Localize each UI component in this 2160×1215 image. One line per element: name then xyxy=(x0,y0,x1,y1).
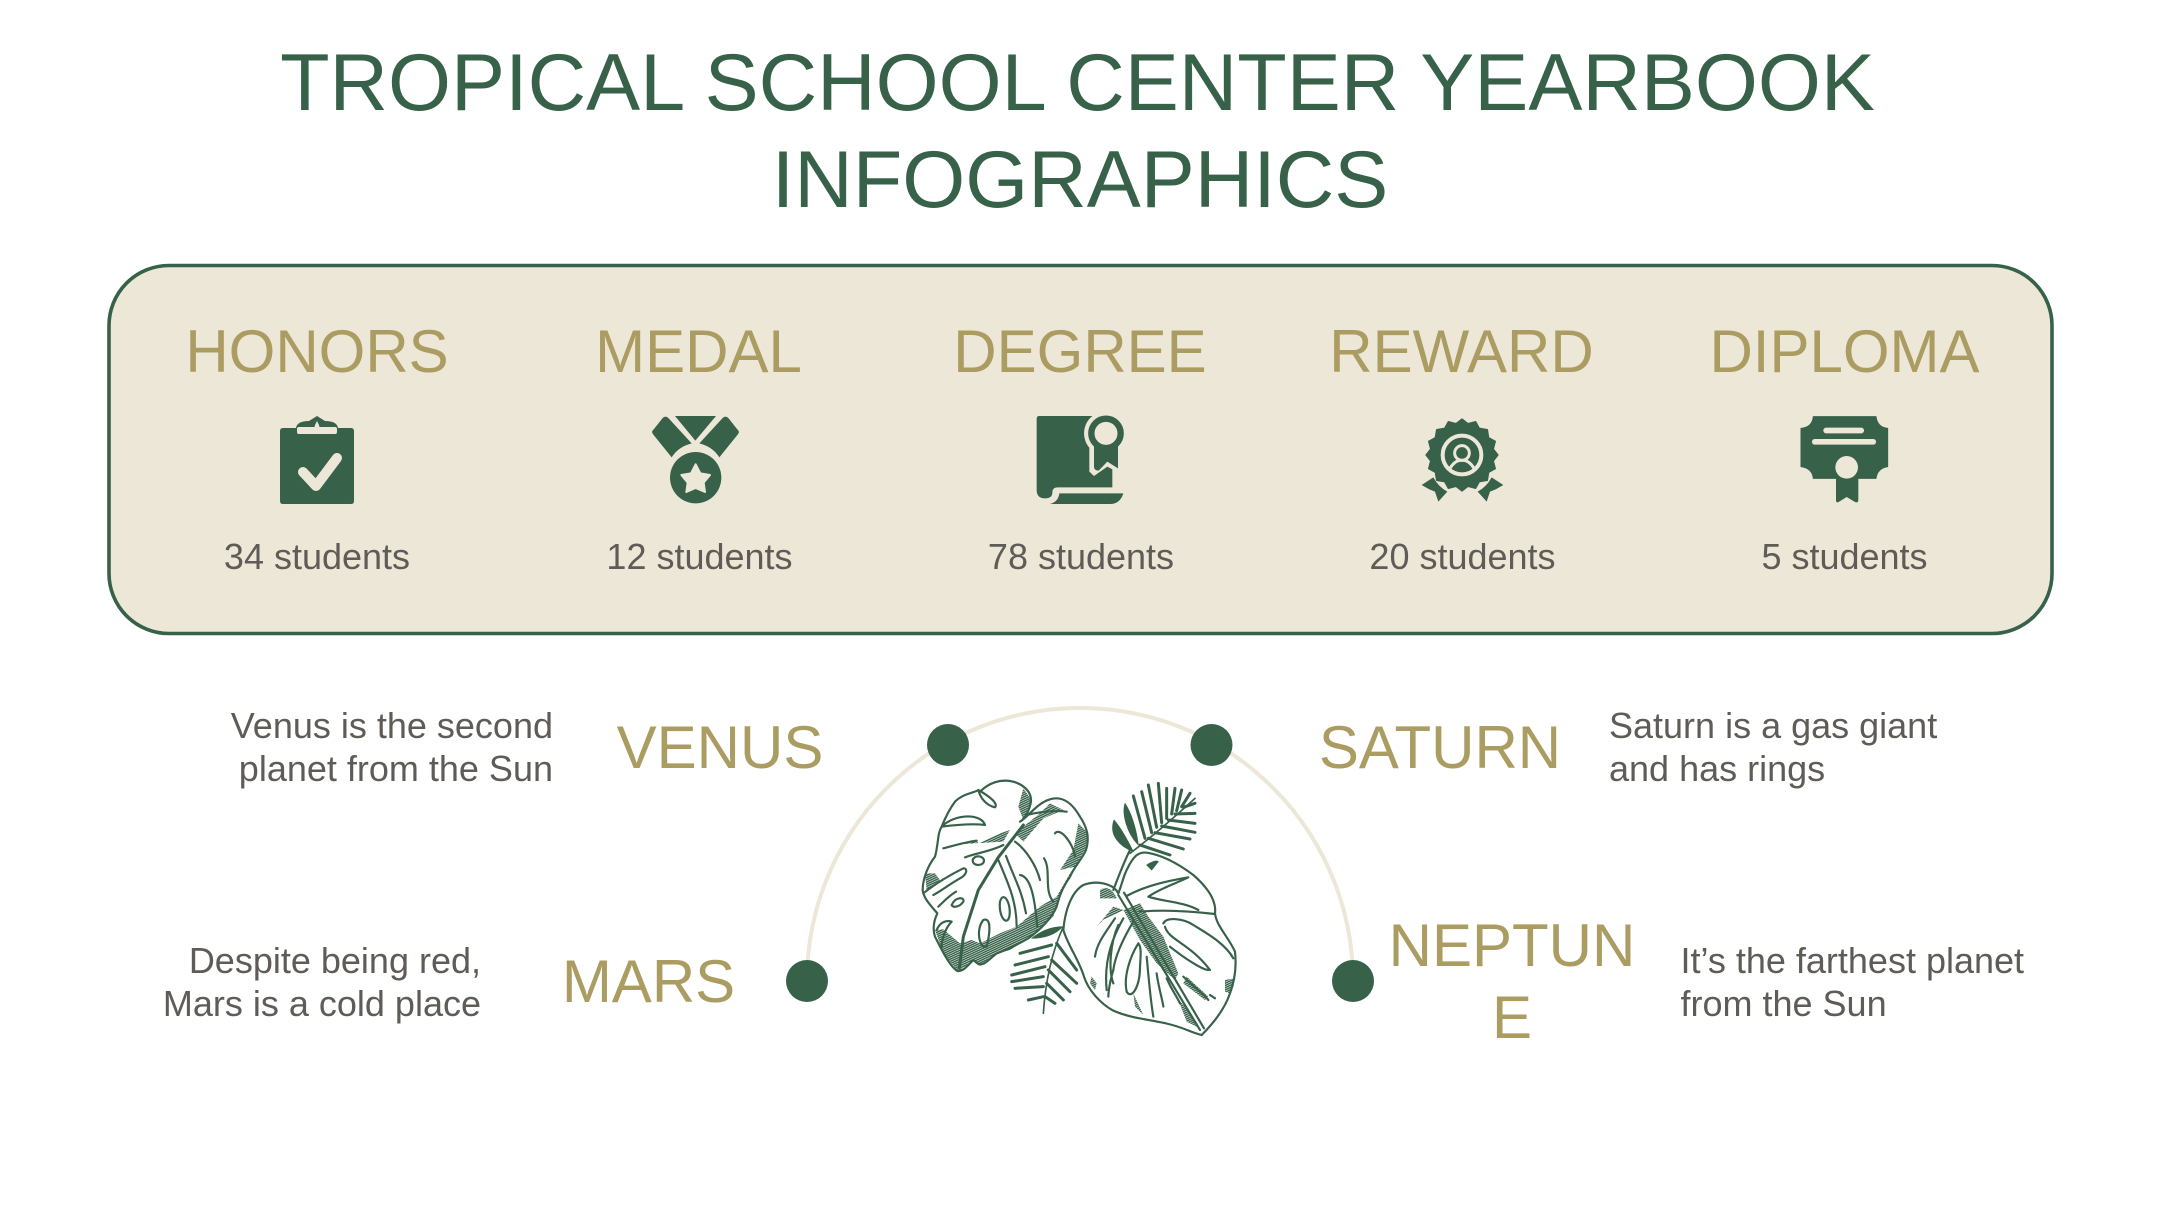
icon: diploma xyxy=(1801,417,1888,502)
label: saturn: SATURN xyxy=(1319,714,1561,781)
column: degree: 78 students xyxy=(988,536,1174,577)
label: mars: Despite being red, xyxy=(189,940,481,981)
label: mars xyxy=(163,940,735,1024)
upper palm frond xyxy=(1113,783,1195,855)
column: diploma: 5 students xyxy=(1761,536,1928,577)
column: reward: REWARD xyxy=(1329,318,1594,385)
label: venus xyxy=(231,705,823,789)
dot: mars xyxy=(786,960,828,1002)
column: honors xyxy=(185,318,449,577)
column: medal: MEDAL xyxy=(595,318,802,385)
label: neptune: E xyxy=(1492,984,1532,1051)
column: medal: 12 students xyxy=(606,536,793,577)
label: venus: planet from the Sun xyxy=(239,748,553,789)
label: neptune: from the Sun xyxy=(1680,983,1887,1024)
title: INFOGRAPHICS xyxy=(772,135,1388,225)
label: mars: Mars is a cold place xyxy=(163,983,481,1024)
label: saturn: Saturn is a gas giant xyxy=(1609,705,1937,746)
lower palm frond xyxy=(1012,927,1077,1013)
label: venus: VENUS xyxy=(617,714,823,781)
column: reward xyxy=(1329,318,1594,577)
title xyxy=(280,38,1875,225)
right leaf xyxy=(1063,850,1236,1035)
icon: medal xyxy=(652,416,739,503)
column: diploma: DIPLOMA xyxy=(1709,318,1980,385)
column: diploma xyxy=(1709,318,1980,577)
icon: rosette xyxy=(1422,419,1503,502)
label: saturn: and has rings xyxy=(1609,748,1825,789)
dot: venus xyxy=(927,724,969,766)
dot: neptune xyxy=(1332,960,1374,1002)
column: honors: 34 students xyxy=(224,536,410,577)
dot: saturn xyxy=(1190,724,1232,766)
column: honors: HONORS xyxy=(185,318,449,385)
panel: awards xyxy=(109,266,2052,634)
arc connector xyxy=(807,708,1353,981)
illustration: monstera leaves xyxy=(923,781,1236,1035)
label: neptune: NEPTUN xyxy=(1389,912,1635,979)
label: saturn xyxy=(1319,705,1937,789)
label: neptune xyxy=(1389,912,2024,1051)
column: degree: DEGREE xyxy=(953,318,1207,385)
title: TROPICAL SCHOOL CENTER YEARBOOK xyxy=(280,38,1875,128)
column: medal xyxy=(595,318,802,577)
icon: scroll with ribbon xyxy=(1037,411,1128,504)
label: mars: MARS xyxy=(562,948,735,1015)
label: venus: Venus is the second xyxy=(231,705,553,746)
icon: clipboard xyxy=(280,416,354,504)
left leaf xyxy=(923,781,1088,972)
column: reward: 20 students xyxy=(1369,536,1556,577)
label: neptune: It’s the farthest planet xyxy=(1680,940,2024,981)
column: degree xyxy=(953,318,1207,577)
